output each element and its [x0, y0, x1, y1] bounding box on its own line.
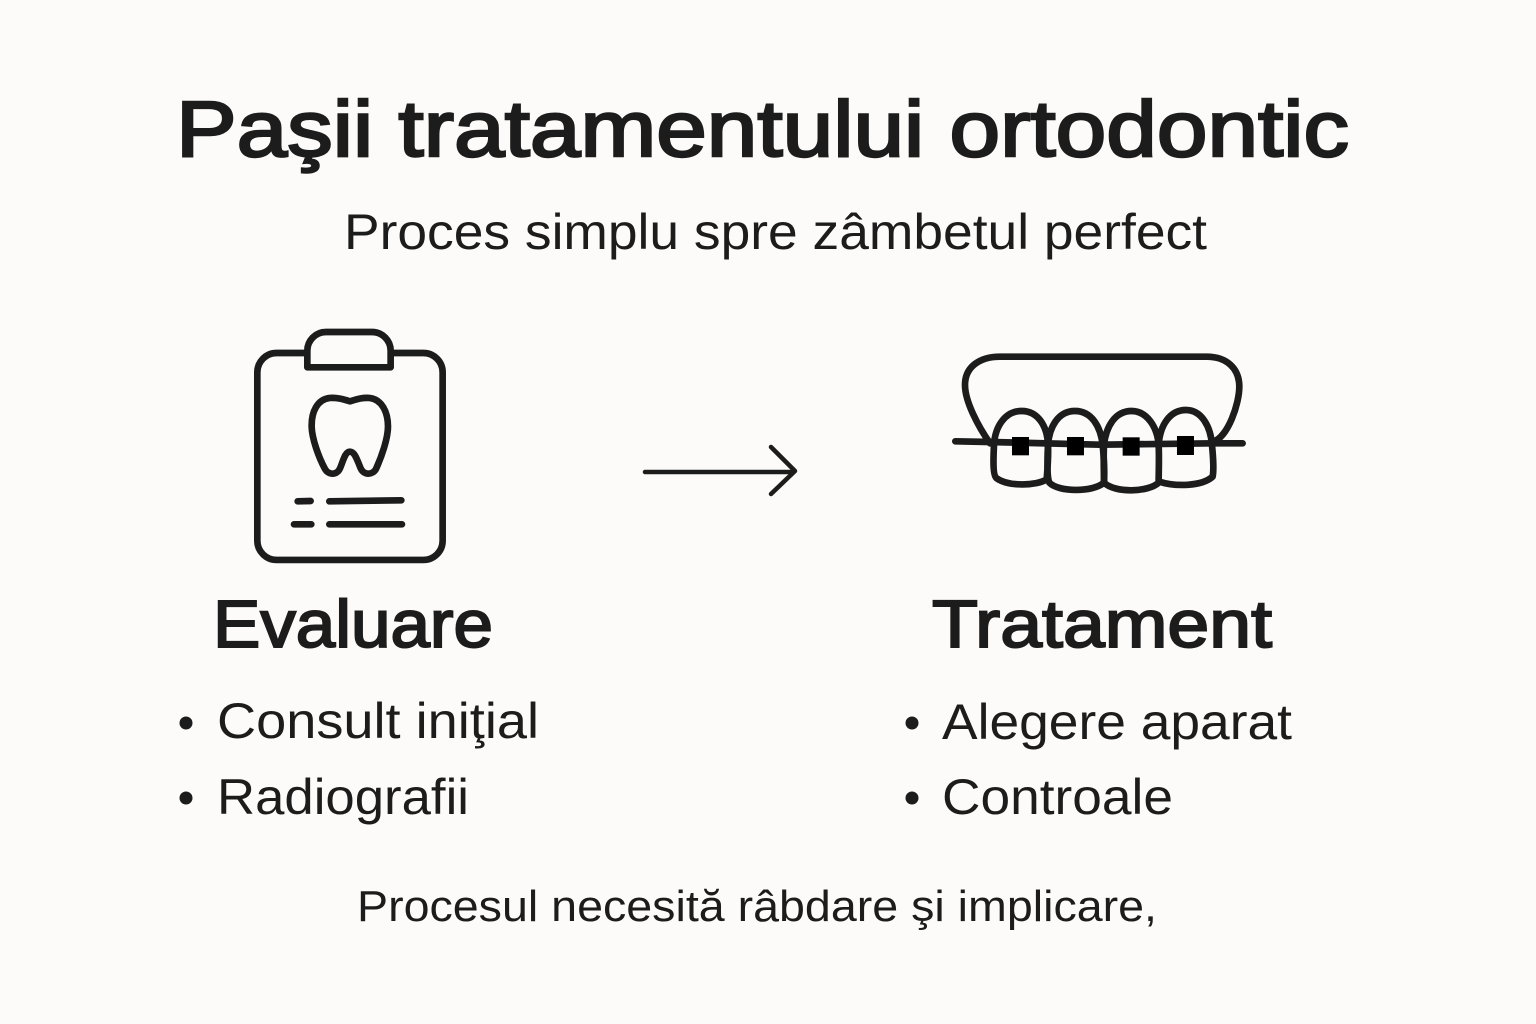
- icon: clipboard with tooth: [257, 332, 443, 560]
- list: evaluare items: Radiografii: [217, 769, 469, 825]
- list: tratament items: Controale: [942, 769, 1173, 825]
- list: evaluare items: [180, 693, 539, 825]
- list: tratament items: Alegere aparat: [942, 694, 1292, 750]
- heading: Tratament: Tratament: [932, 587, 1272, 662]
- footer note: Procesul necesită râbdare şi implicare,: [357, 882, 1157, 931]
- panel: evaluare: [180, 332, 539, 825]
- list: tratament items: [906, 694, 1292, 825]
- arrow: [645, 447, 795, 494]
- list: evaluare items: Consult iniţial: [217, 693, 539, 749]
- title: Paşii tratamentului ortodontic: [176, 84, 1349, 173]
- icon: braces on teeth: [955, 357, 1243, 490]
- panel: tratament: [906, 357, 1292, 825]
- subtitle: Proces simplu spre zâmbetul perfect: [344, 204, 1207, 260]
- heading: Evaluare: Evaluare: [213, 587, 493, 662]
